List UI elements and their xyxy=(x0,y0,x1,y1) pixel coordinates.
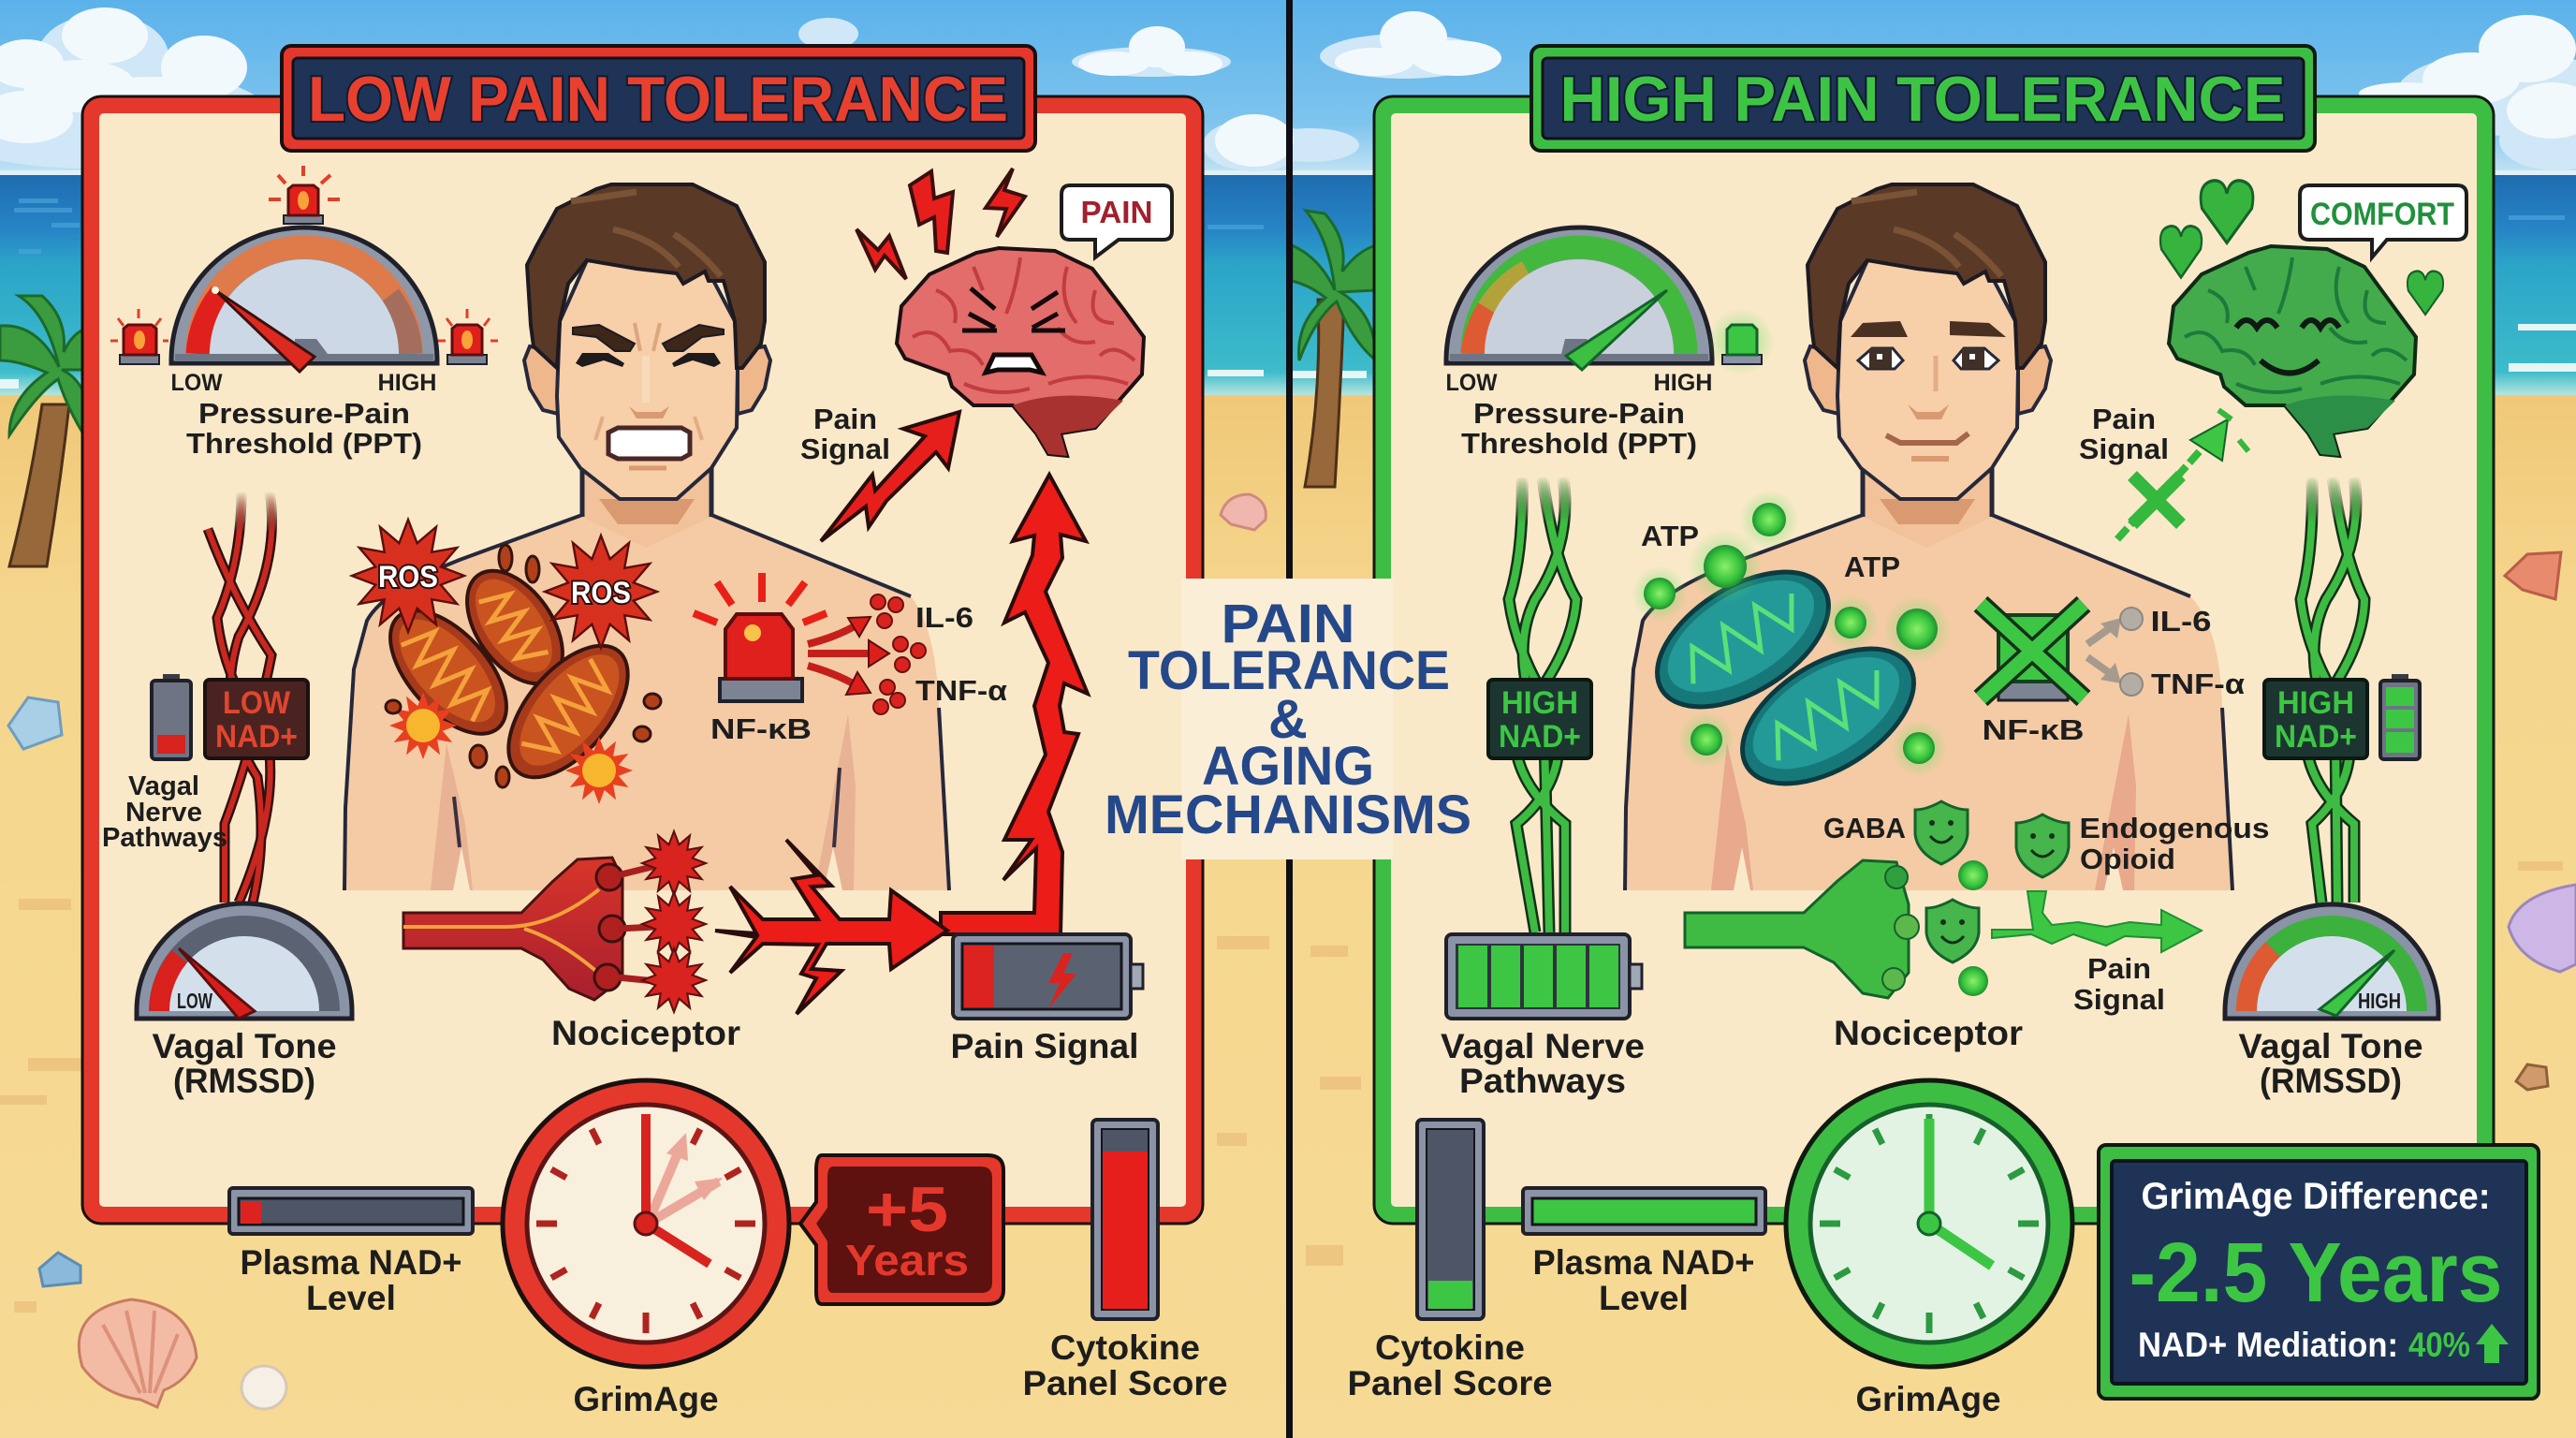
icon: green nociceptor xyxy=(1685,860,2023,1052)
icon: NF-kB blocked: IL-6 xyxy=(2151,605,2211,638)
bar: high cytokine panel score xyxy=(1022,1120,1228,1402)
icon: NF-kB blocked: NF-κB xyxy=(1983,713,2084,746)
bar: low plasma NAD+ xyxy=(229,1188,473,1317)
icon: low vagal nerve pathways xyxy=(208,492,272,902)
bar: low cytokine panel score xyxy=(1348,1120,1552,1402)
smile xyxy=(2261,360,2319,373)
bar: low cytokine panel score: Panel Score xyxy=(1348,1364,1552,1402)
icon: high vagal pathways (left) xyxy=(1509,477,1576,932)
torso xyxy=(344,506,949,890)
hands xyxy=(646,1114,710,1264)
nose xyxy=(1908,404,1949,419)
callout: GrimAge difference: 40% xyxy=(2408,1326,2470,1364)
center title block: PAIN xyxy=(1221,594,1355,654)
icon: green GrimAge clock: GrimAge xyxy=(1855,1380,2001,1418)
brows xyxy=(573,325,724,351)
face xyxy=(1837,260,2018,499)
shells on the sand xyxy=(8,494,2576,1409)
badge: high NAD+ (left): NAD+ xyxy=(1499,719,1581,755)
hair xyxy=(527,184,765,368)
needle xyxy=(215,290,315,372)
icon: red nociceptor: Nociceptor xyxy=(551,1014,740,1052)
center title block: TOLERANCE xyxy=(1128,640,1450,701)
heading: low pain tolerance: LOW PAIN TOLERANCE xyxy=(308,64,1008,135)
icon: NF-kB alarm and cytokines: NF-κB xyxy=(710,712,812,745)
hair xyxy=(1808,184,2045,368)
label: Pressure-Pain xyxy=(198,397,410,430)
arrow: large red pain signal xyxy=(715,475,1088,1014)
gauge: high pressure-pain threshold: LOW xyxy=(1445,370,1498,396)
arrow: weak green pain signal xyxy=(1992,891,2202,1016)
center title block: AGING xyxy=(1202,736,1374,797)
bar: high plasma NAD+ xyxy=(1523,1188,1765,1317)
label: pain signal to brain (blocked): Pain xyxy=(2092,403,2156,435)
mouth xyxy=(986,355,1042,373)
label: vagal nerve pathways (low): Pathways xyxy=(102,823,227,853)
bar: high plasma NAD+: Plasma NAD+ xyxy=(1533,1243,1754,1282)
label xyxy=(2239,1027,2422,1100)
icon: angry brain xyxy=(897,248,1144,456)
label: pain signal to brain xyxy=(800,403,890,465)
ears xyxy=(524,346,770,414)
ROS bursts: ROS xyxy=(571,576,631,609)
sea stripes and whitecaps xyxy=(0,198,2576,389)
label: vagal nerve pathways (low) xyxy=(102,771,227,853)
badge: low NAD+ xyxy=(205,680,308,758)
badge: high NAD+ (left): HIGH xyxy=(1501,685,1578,721)
badge: high NAD+ (right): HIGH xyxy=(2277,685,2354,721)
bar: high cytokine panel score: Cytokine xyxy=(1050,1328,1200,1367)
callout: +5 years xyxy=(800,1155,1003,1304)
icon: high vagal pathways (right) xyxy=(2301,477,2364,902)
icon: protective shields and GABA: Opioid xyxy=(2080,843,2175,875)
gauge: low pressure-pain threshold: LOW xyxy=(170,370,223,396)
label: Vagal Tone xyxy=(152,1027,337,1065)
label xyxy=(1461,397,1697,460)
gauge: low vagal tone xyxy=(137,903,352,1100)
icon: full vagal battery: Pathways xyxy=(1459,1062,1626,1100)
badge: high NAD+ (right): NAD+ xyxy=(2275,719,2357,755)
arm creases xyxy=(431,714,856,890)
happy eyes xyxy=(2236,320,2339,328)
icon: NF-kB blocked: TNF-α xyxy=(2151,668,2245,700)
nose xyxy=(629,406,669,418)
brows xyxy=(1851,321,2006,337)
gauge: low pressure-pain threshold: HIGH xyxy=(378,370,436,396)
icon: pain signal battery xyxy=(951,934,1143,1065)
panel: high pain tolerance xyxy=(1374,96,2494,1224)
arrow: weak green pain signal: Pain xyxy=(2087,952,2151,985)
label xyxy=(152,1027,337,1100)
ATP orbs xyxy=(1632,490,1951,776)
torso xyxy=(1625,506,2232,890)
label: Pressure-Pain xyxy=(1473,397,1685,430)
icon: red sirens around gauge xyxy=(110,166,498,364)
ROS bursts xyxy=(352,520,657,648)
icon: red GrimAge clock: GrimAge xyxy=(573,1380,719,1418)
debris xyxy=(386,545,661,787)
callout: COMFORT speech bubble xyxy=(2300,185,2466,257)
center title block: & xyxy=(1268,689,1308,750)
icon: up arrow xyxy=(2476,1324,2509,1363)
bar: high plasma NAD+: Level xyxy=(1599,1279,1689,1317)
muted arrows and cytokines xyxy=(2087,625,2114,676)
icon: protective shields and GABA xyxy=(1823,801,2269,996)
icon: green hearts xyxy=(2160,181,2443,315)
label: (RMSSD) xyxy=(173,1062,315,1100)
sand speckles xyxy=(0,861,2563,1313)
gauge: high vagal tone: HIGH xyxy=(2358,989,2401,1013)
callout: COMFORT speech bubble: COMFORT xyxy=(2310,197,2454,232)
callout: GrimAge difference: NAD+ Mediation: xyxy=(2138,1326,2398,1364)
face xyxy=(557,260,738,499)
label: pain signal to brain (blocked): Signal xyxy=(2079,433,2169,465)
gauge: low vagal tone: LOW xyxy=(177,989,212,1013)
label: pain signal to brain (blocked) xyxy=(2079,403,2169,465)
arm creases xyxy=(1711,714,2136,890)
ears xyxy=(1805,346,2051,414)
badge: low NAD+: LOW xyxy=(223,685,291,721)
panel: low pain tolerance xyxy=(82,96,1203,1224)
label: Vagal Tone xyxy=(2239,1027,2422,1065)
divider xyxy=(1286,0,1293,1438)
badge: high NAD+ (right) xyxy=(2264,680,2367,758)
arrow: blocked green signal xyxy=(2117,410,2248,539)
badge: high NAD+ (left) xyxy=(1488,680,1591,758)
center title block xyxy=(1105,579,1471,859)
icon: healthy mitochondria and ATP: ATP xyxy=(1641,520,1699,552)
label: vagal nerve pathways (low): Nerve xyxy=(125,798,202,828)
arrow: weak green pain signal: Signal xyxy=(2073,983,2165,1016)
icon: NF-kB alarm and cytokines xyxy=(694,573,1007,745)
icon: small full battery xyxy=(2380,674,2420,759)
icon: NF-kB blocked xyxy=(1981,604,2245,746)
explosions xyxy=(389,692,633,804)
bar: high cytokine panel score: Panel Score xyxy=(1022,1364,1228,1402)
icon: right palm tree xyxy=(1292,211,1376,487)
clouds xyxy=(0,7,2576,171)
icon: green nociceptor: Nociceptor xyxy=(1834,1014,2023,1052)
label: (RMSSD) xyxy=(2260,1062,2402,1100)
neck xyxy=(1863,463,1992,548)
heading: low pain tolerance xyxy=(282,46,1035,151)
icon: protective shields and GABA: Endogenous xyxy=(2080,812,2269,844)
callout: GrimAge difference xyxy=(2099,1145,2539,1399)
label: Threshold (PPT) xyxy=(186,427,422,460)
bar: low plasma NAD+: Plasma NAD+ xyxy=(240,1243,462,1282)
clenched teeth xyxy=(608,428,690,459)
icon: healthy mitochondria and ATP xyxy=(1632,490,1951,812)
callout: +5 years: Years xyxy=(845,1236,969,1284)
icon: left palm tree xyxy=(0,296,94,566)
bar: low cytokine panel score: Cytokine xyxy=(1375,1328,1525,1367)
center title block: MECHANISMS xyxy=(1105,785,1471,845)
label: pain signal to brain: Pain xyxy=(813,403,877,435)
label xyxy=(186,397,422,460)
angry eyes xyxy=(962,288,1065,330)
arrow: zigzag signal to brain xyxy=(821,412,959,541)
gauge: high vagal tone xyxy=(2225,904,2438,1100)
shut eyes xyxy=(576,353,721,367)
icon: mitochondria and ROS cluster xyxy=(352,520,661,804)
smile xyxy=(1886,433,1969,443)
callout: PAIN speech bubble xyxy=(1061,185,1172,257)
icon: green GrimAge clock xyxy=(1786,1080,2072,1418)
ghost hands xyxy=(651,1147,719,1222)
cytokine arrows xyxy=(808,624,875,687)
icon: healthy mitochondria and ATP: ATP xyxy=(1844,550,1900,583)
bar: low plasma NAD+: Level xyxy=(306,1279,396,1317)
heading: high pain tolerance xyxy=(1531,46,2315,151)
label: pain signal to brain: Signal xyxy=(800,433,890,465)
callout: GrimAge difference: GrimAge Difference: xyxy=(2142,1176,2490,1217)
person: high tolerance calm man xyxy=(1625,184,2232,890)
callout: +5 years: +5 xyxy=(866,1174,948,1245)
ROS bursts: ROS xyxy=(378,560,438,594)
icon: happy brain xyxy=(2169,246,2416,456)
icon: pain bolts above brain xyxy=(856,169,1025,279)
label: vagal nerve pathways (low): Vagal xyxy=(128,771,199,801)
neck xyxy=(582,463,711,548)
icon: protective shields and GABA: GABA xyxy=(1823,812,1906,844)
icon: NF-kB alarm and cytokines: TNF-α xyxy=(915,674,1007,707)
gauge: low pressure-pain threshold xyxy=(170,227,437,460)
callout: PAIN speech bubble: PAIN xyxy=(1080,195,1153,229)
icon: NF-kB alarm and cytokines: IL-6 xyxy=(915,601,973,634)
icon: full vagal battery: Vagal Nerve xyxy=(1441,1027,1645,1065)
gauge: high pressure-pain threshold: HIGH xyxy=(1653,370,1713,396)
person: low tolerance grimacing man xyxy=(344,184,949,890)
icon: low NAD battery xyxy=(152,674,191,759)
icon: full vagal battery xyxy=(1441,934,1645,1100)
badge: low NAD+: NAD+ xyxy=(215,719,298,755)
icon: red nociceptor xyxy=(403,831,740,1052)
icon: pain signal battery: Pain Signal xyxy=(951,1027,1138,1065)
heading: high pain tolerance: HIGH PAIN TOLERANCE xyxy=(1559,64,2286,135)
callout: GrimAge difference: -2.5 Years xyxy=(2129,1226,2503,1320)
icon: green siren xyxy=(1707,308,1775,375)
eyes xyxy=(1858,348,1998,369)
label: Threshold (PPT) xyxy=(1461,427,1697,460)
gauge: high pressure-pain threshold xyxy=(1445,227,1713,460)
icon: red GrimAge clock xyxy=(503,1080,789,1418)
